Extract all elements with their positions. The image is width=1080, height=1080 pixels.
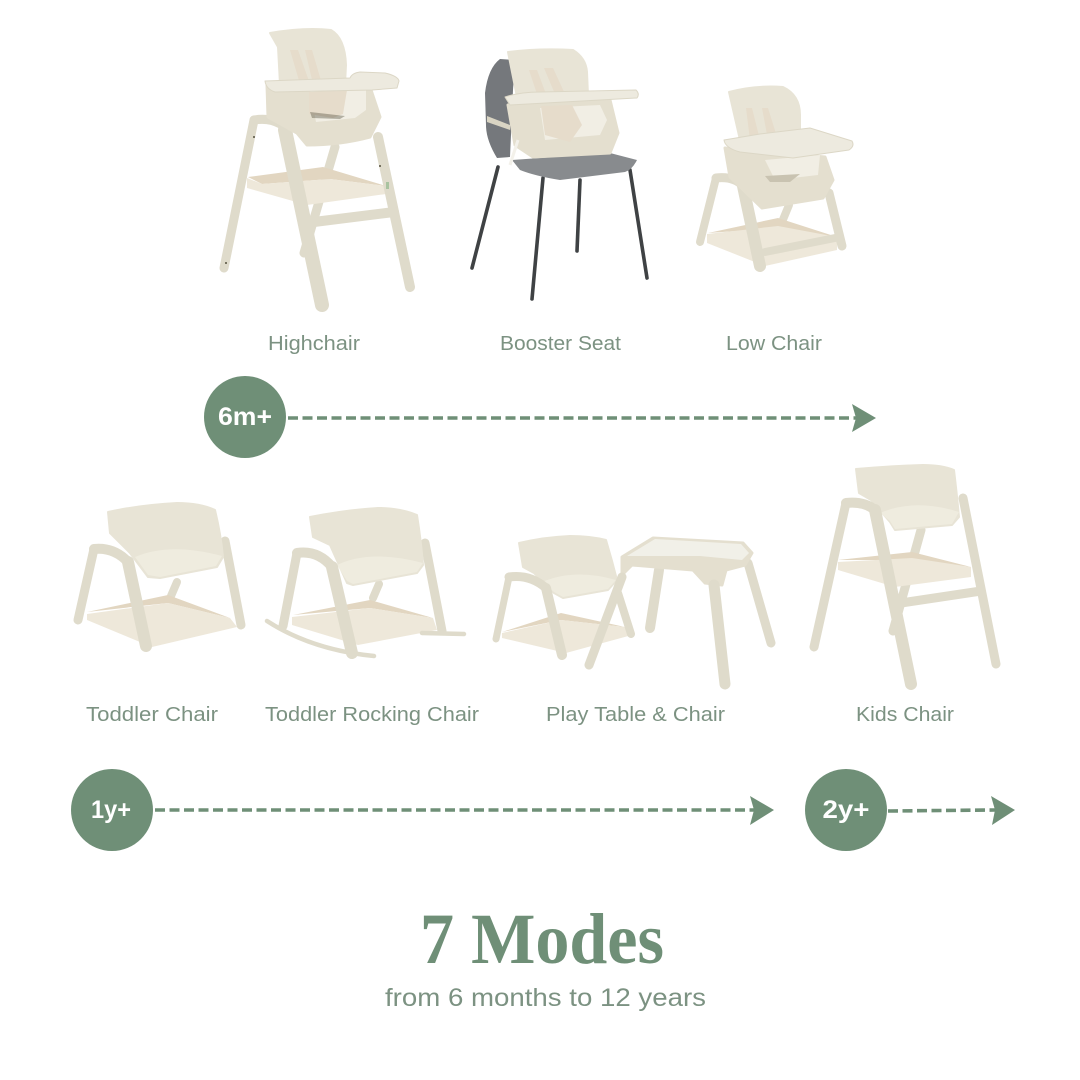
badge: 1y+ bbox=[71, 769, 153, 851]
product: booster seat on dining chair bbox=[472, 49, 647, 299]
caption: Toddler Chair: Toddler Chair bbox=[86, 704, 218, 726]
caption: Toddler Rocking Chair: Toddler Rocking Chair bbox=[265, 704, 479, 726]
arrow: 2y+ timeline bbox=[888, 796, 1015, 825]
badge: 2y+: 2y+ bbox=[822, 796, 870, 824]
badge: 1y+: 1y+ bbox=[91, 796, 131, 824]
caption: Booster Seat: Booster Seat bbox=[500, 333, 621, 355]
badge: 2y+ bbox=[805, 769, 887, 851]
caption: Play Table and Chair: Play Table & Chair bbox=[546, 704, 725, 726]
subtitle: from 6 months to 12 years bbox=[385, 984, 706, 1012]
product: play table and chair bbox=[496, 536, 771, 684]
badge: 6m+ bbox=[204, 376, 286, 458]
title: 7 Modes: 7 Modes bbox=[420, 899, 664, 979]
caption: Kids Chair: Kids Chair bbox=[856, 704, 954, 726]
product: toddler rocking chair bbox=[267, 508, 464, 656]
product: toddler chair bbox=[78, 503, 241, 647]
arrow: 1y+ timeline bbox=[155, 796, 774, 825]
age marker: 1y+ with arrow bbox=[71, 769, 774, 851]
badge: 6m+: 6m+ bbox=[218, 403, 272, 431]
age marker: 2y+ with arrow bbox=[805, 769, 1015, 851]
product: highchair bbox=[224, 29, 410, 305]
arrow: 6m+ timeline bbox=[288, 404, 876, 432]
age marker: 6m+ with arrow bbox=[204, 376, 876, 458]
caption: Low Chair: Low Chair bbox=[726, 333, 822, 355]
product: low chair bbox=[700, 87, 853, 266]
caption: Highchair: Highchair bbox=[268, 333, 360, 355]
product: kids chair bbox=[814, 465, 996, 684]
